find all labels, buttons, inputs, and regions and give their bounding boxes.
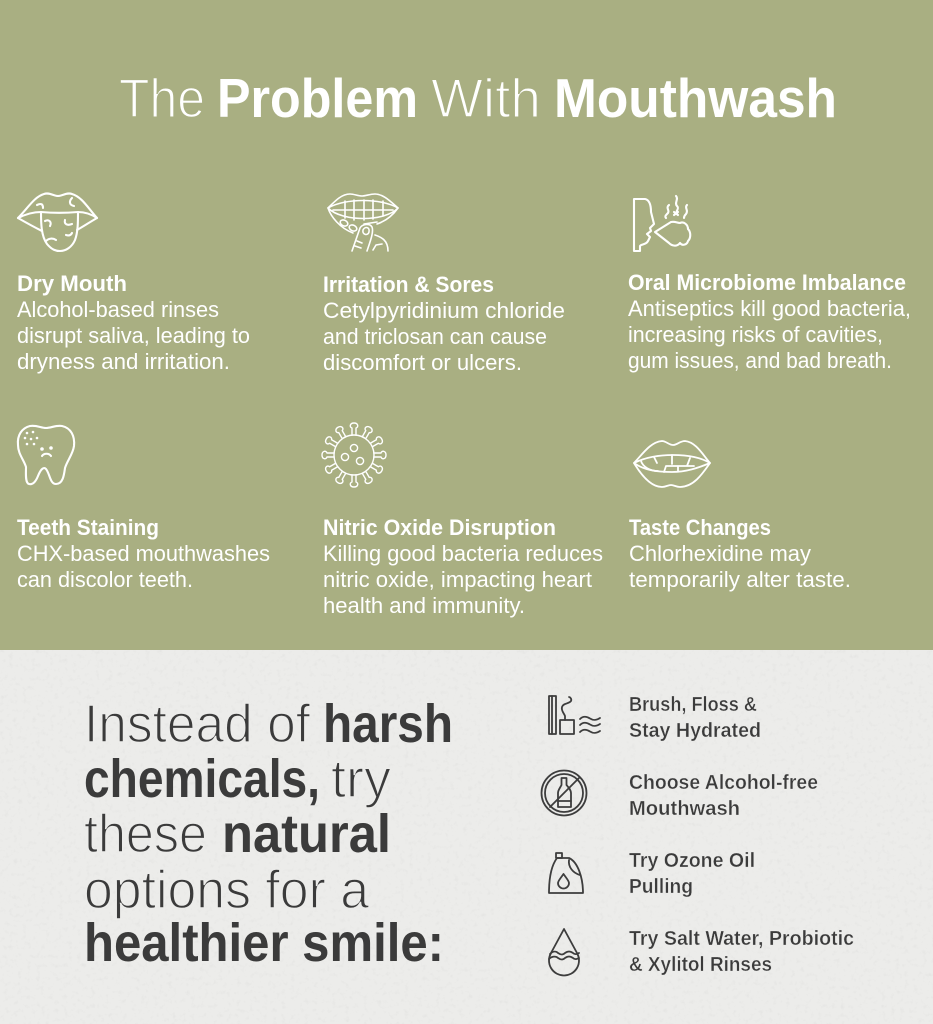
text: teeth staining xyxy=(17,541,270,592)
text: ozone oil pulling: Pulling xyxy=(629,876,693,898)
heading: natural options: these xyxy=(84,804,207,864)
text: taste changes: temporarily alter taste. xyxy=(629,567,851,592)
panel: teeth staining xyxy=(17,426,270,592)
panel: irritation and sores xyxy=(323,194,565,375)
icon detail: stain dots xyxy=(24,431,53,451)
icon: no bottle xyxy=(542,770,586,816)
heading: teeth staining: Teeth Staining xyxy=(17,515,159,540)
panel: nitric oxide disruption xyxy=(322,423,603,618)
text: nitric oxide disruption: health and immunity. xyxy=(323,593,525,618)
heading: oral microbiome imbalance: Oral Microbiome Imbalance xyxy=(628,270,906,295)
text: alcohol-free mouthwash: Mouthwash xyxy=(629,798,740,820)
title: The xyxy=(119,67,205,129)
heading: natural options: natural xyxy=(222,804,391,864)
text: oral microbiome imbalance xyxy=(628,296,911,373)
title: Problem xyxy=(217,67,418,129)
text: salt water rinses: & Xylitol Rinses xyxy=(629,954,772,976)
icon: virus xyxy=(322,423,386,487)
icon: toothbrush floss water xyxy=(549,696,600,734)
heading: natural options: options for a xyxy=(84,860,370,920)
item: salt water rinses xyxy=(549,928,854,976)
text: ozone oil pulling: Try Ozone Oil xyxy=(629,850,755,872)
heading: natural options: try xyxy=(331,749,391,809)
heading: taste changes: Taste Changes xyxy=(629,515,771,540)
title: With xyxy=(431,67,541,129)
panel: taste changes xyxy=(629,441,851,592)
text: brush floss hydrate: Brush, Floss & xyxy=(629,694,757,716)
heading: natural options xyxy=(84,694,453,973)
heading: irritation and sores: Irritation & Sores xyxy=(323,272,494,297)
text: taste changes: Chlorhexidine may xyxy=(629,541,811,566)
heading: natural options: harsh xyxy=(323,694,453,754)
title xyxy=(119,67,837,129)
text: nitric oxide disruption xyxy=(323,541,603,618)
panel: paper background xyxy=(0,650,933,1024)
icon: bad breath xyxy=(634,196,690,251)
text: oral microbiome imbalance: gum issues, and bad breath. xyxy=(628,348,892,373)
heading: natural options: chemicals, xyxy=(84,749,320,809)
text: salt water rinses xyxy=(629,928,854,976)
heading: natural options: Instead of xyxy=(84,694,311,754)
text: alcohol-free mouthwash: Choose Alcohol-free xyxy=(629,772,818,794)
panel: dry mouth xyxy=(17,193,250,374)
text: dry mouth: disrupt saliva, leading to xyxy=(17,323,250,348)
panel: problems background xyxy=(0,0,933,650)
text: salt water rinses: Try Salt Water, Probiotic xyxy=(629,928,854,950)
text: alcohol-free mouthwash xyxy=(629,772,818,820)
heading: nitric oxide disruption: Nitric Oxide Disruption xyxy=(323,515,556,540)
item: alcohol-free mouthwash xyxy=(542,770,818,820)
icon: lips xyxy=(634,441,710,487)
text: irritation and sores: discomfort or ulcers. xyxy=(323,350,522,375)
text: brush floss hydrate: Stay Hydrated xyxy=(629,720,761,742)
icon: tongue and lips xyxy=(18,193,97,251)
item: brush floss hydrate xyxy=(549,694,761,742)
item: ozone oil pulling xyxy=(549,850,755,898)
text: dry mouth xyxy=(17,297,250,374)
heading: dry mouth: Dry Mouth xyxy=(17,271,127,296)
text: oral microbiome imbalance: increasing risks of cavities, xyxy=(628,322,883,347)
text: oral microbiome imbalance: Antiseptics kill good bacteria, xyxy=(628,296,911,321)
text: irritation and sores: Cetylpyridinium chloride xyxy=(323,298,565,323)
text: taste changes xyxy=(629,541,851,592)
icon: lips with finger xyxy=(328,194,398,251)
icon: sad tooth xyxy=(18,426,74,484)
title: Mouthwash xyxy=(554,67,837,129)
text: dry mouth: dryness and irritation. xyxy=(17,349,230,374)
icon: oil jug xyxy=(549,853,583,893)
text: ozone oil pulling xyxy=(629,850,755,898)
icon: water drop xyxy=(549,929,579,975)
panel: oral microbiome imbalance xyxy=(628,196,911,373)
heading: natural options: healthier smile: xyxy=(84,913,444,973)
text: nitric oxide disruption: nitric oxide, impacting heart xyxy=(323,567,592,592)
text: dry mouth: Alcohol-based rinses xyxy=(17,297,219,322)
text: irritation and sores: and triclosan can cause xyxy=(323,324,547,349)
text: brush floss hydrate xyxy=(629,694,761,742)
text: irritation and sores xyxy=(323,298,565,375)
text: teeth staining: can discolor teeth. xyxy=(17,567,193,592)
text: teeth staining: CHX-based mouthwashes xyxy=(17,541,270,566)
text: nitric oxide disruption: Killing good bacteria reduces xyxy=(323,541,603,566)
